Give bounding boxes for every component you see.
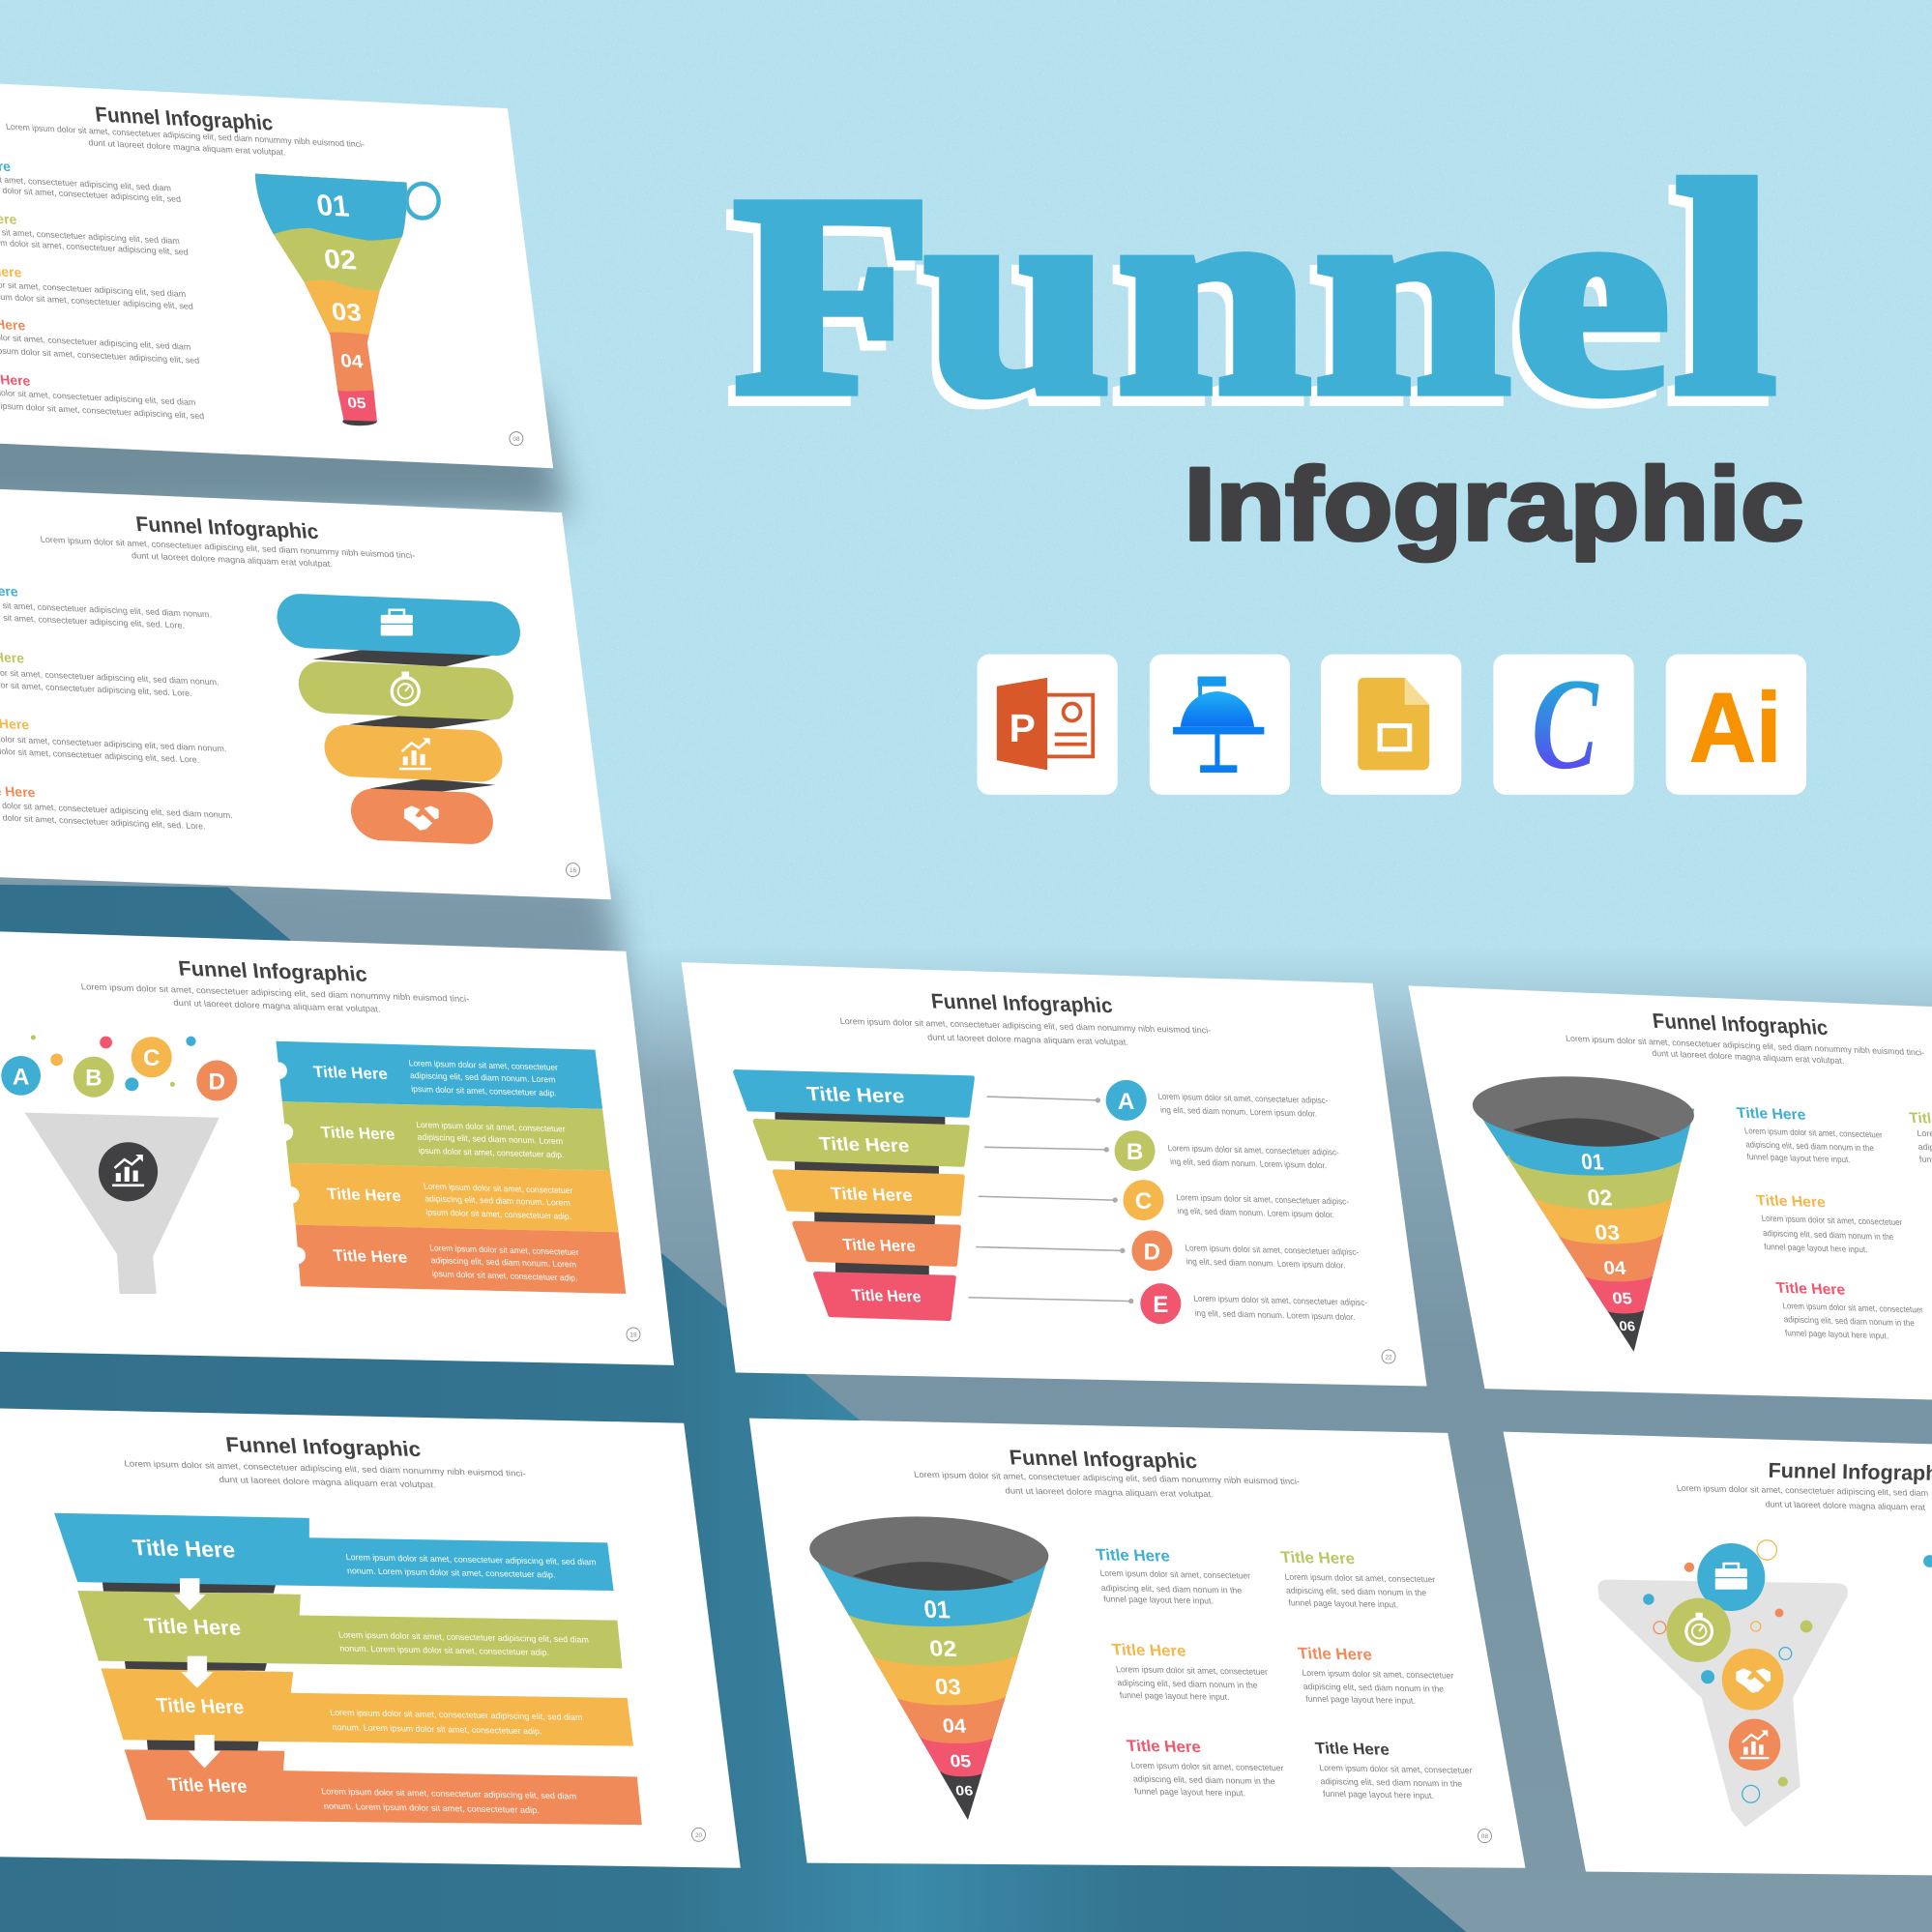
text items: Title Here: [1755, 1192, 1827, 1211]
text items: Lorem ipsum dolor sit amet, consectetuer: [1115, 1664, 1268, 1677]
intro text: Lorem ipsum dolor sit amet, consectetuer adipiscing elit, sed diam nonummy nibh euismod tinci-: [80, 981, 470, 1004]
icon: Illustrator: [1666, 655, 1806, 795]
page number: [567, 864, 580, 877]
stepped funnel: Lorem ipsum dolor sit amet, consectetuer adipiscing elit, sed diam: [321, 1786, 577, 1801]
descriptions: ing elit, sed diam nonum. Lorem ipsum dolor.: [1177, 1206, 1334, 1219]
intro text: Lorem ipsum dolor sit amet, consectetuer adipiscing elit, sed diam nonummy nibh euismod tinci-: [40, 535, 416, 560]
stacked bands: ipsum dolor sit amet, consectetuer adip.: [418, 1146, 565, 1159]
intro text: dunt ut laoreet dolore magna aliquam erat volutpat.: [88, 137, 286, 158]
icon: Illustrator: Ai: [1689, 672, 1782, 782]
letter badges: B: [1127, 1139, 1143, 1165]
intro text: Lorem ipsum dolor sit amet, consectetuer adipiscing elit, sed diam nonummy nibh euismod tinci-: [839, 1016, 1212, 1035]
title: Funnel Infographic: [929, 989, 1114, 1017]
page number: [510, 432, 523, 446]
text items: [1736, 1105, 1932, 1340]
intro text: dunt ut laoreet dolore magna aliquam erat: [1765, 1499, 1926, 1512]
text items: funnel page layout here input.: [1322, 1789, 1434, 1800]
page number: 19: [629, 1332, 637, 1339]
page number: [1382, 1350, 1395, 1363]
stacked bands: ipsum dolor sit amet, consectetuer adip.: [425, 1207, 572, 1221]
text items: funnel page layout here input.: [1134, 1786, 1246, 1798]
chart: wavy funnel: 05: [346, 395, 367, 412]
text items: Title Here: [1111, 1640, 1187, 1660]
intro text: dunt ut laoreet dolore magna aliquam erat volutpat.: [926, 1032, 1128, 1047]
page number: [627, 1328, 640, 1341]
descriptions: ing elit, sed diam nonum. Lorem ipsum dolor.: [1169, 1156, 1328, 1170]
chart: wavy funnel: 03: [330, 299, 363, 327]
chart: wavy funnel: [247, 166, 439, 431]
title: Funnel Infographic: [1008, 1445, 1198, 1473]
heading: Funnel: F: [734, 139, 931, 453]
panel: slide 19 grey funnel: [0, 931, 674, 1365]
text items: [1095, 1545, 1473, 1800]
grey funnel with icon circles: [1598, 1540, 1932, 1827]
heading: Funnel: n: [1118, 139, 1310, 453]
page number: [1478, 1830, 1491, 1843]
tiered funnel: Title Here: [830, 1184, 914, 1205]
stacked bands: Lorem ipsum dolor sit amet, consectetuer: [429, 1243, 579, 1257]
text items: funnel page layout here input.: [1784, 1328, 1889, 1340]
stacked bands: adipiscing elit, sed diam nonum. Lorem: [424, 1193, 571, 1208]
stacked bands: Lorem ipsum dolor sit amet, consectetuer: [416, 1120, 566, 1134]
descriptions: Lorem ipsum dolor sit amet, consectetuer adipisc-: [1176, 1192, 1350, 1207]
letter badges: [1106, 1080, 1181, 1324]
cone chart: 01: [922, 1596, 951, 1624]
tiered funnel: Title Here: [851, 1286, 922, 1305]
connector lines: [969, 1097, 1133, 1303]
title: Funnel Infographic: [134, 512, 320, 543]
letter badges: A: [1118, 1089, 1134, 1115]
icon: briefcase: [381, 610, 413, 636]
heading: Funnel: u: [918, 149, 1102, 462]
tiered funnel: Title Here: [805, 1083, 906, 1107]
title: Funnel Infographic: [94, 102, 274, 135]
stacked bands: [270, 1041, 626, 1294]
cone chart: 03: [1594, 1220, 1621, 1244]
heading: Funnel: l: [1667, 131, 1769, 466]
stacked bands: ipsum dolor sit amet, consectetuer adip.: [431, 1269, 578, 1283]
grey funnel with bubbles: D: [209, 1068, 225, 1095]
icon: handshake: [404, 805, 439, 831]
heading: Funnel: F: [727, 149, 924, 462]
stepped funnel: Lorem ipsum dolor sit amet, consectetuer adipiscing elit, sed diam: [345, 1552, 597, 1566]
grey funnel with bubbles: [1, 1035, 237, 1294]
text items: adipiscing elit, sed diam nonum in the: [1783, 1314, 1915, 1328]
intro text: dunt ut laoreet dolore magna aliquam erat volutpat.: [1652, 1048, 1845, 1066]
title: Funnel Infographic: [177, 956, 368, 986]
cone chart: 05: [949, 1751, 972, 1771]
descriptions: Lorem ipsum dolor sit amet, consectetuer adipisc-: [1157, 1092, 1329, 1105]
chart: wavy funnel: 02: [322, 244, 358, 276]
text items: adipiscing elit, sed diam nonum in the: [1132, 1774, 1275, 1786]
stepped funnel: Lorem ipsum dolor sit amet, consectetuer adipiscing elit, sed diam: [329, 1708, 583, 1722]
text items: Title Here: [1736, 1105, 1807, 1124]
text items: Lorem ipsum dolor sit amet, consectetuer: [1099, 1568, 1251, 1581]
icon: Canva: [1493, 653, 1634, 797]
tiered funnel: Title Here: [818, 1134, 911, 1156]
descriptions: ing elit, sed diam nonum. Lorem ipsum dolor.: [1186, 1256, 1346, 1270]
stacked bands: adipiscing elit, sed diam nonum. Lorem: [417, 1132, 564, 1146]
page number: 16: [570, 867, 577, 874]
stacked bands: Title Here: [320, 1123, 396, 1144]
text items: Title Here: [1314, 1739, 1390, 1759]
stacked bands: Lorem ipsum dolor sit amet, consectetuer: [408, 1058, 559, 1072]
intro text: dunt ut laoreet dolore magna aliquam erat volutpat.: [1005, 1485, 1214, 1499]
stepped funnel: [54, 1513, 642, 1825]
text list: [0, 156, 205, 421]
heading: Funnel: [727, 121, 1775, 466]
page number: 08: [512, 436, 520, 443]
stepped funnel: Lorem ipsum dolor sit amet, consectetuer adipiscing elit, sed diam: [337, 1629, 589, 1645]
chart: wavy funnel: 01: [314, 188, 351, 223]
intro text: [80, 981, 470, 1014]
page number: 08: [1481, 1833, 1488, 1840]
intro text: dunt ut laoreet dolore magna aliquam erat volutpat.: [131, 550, 333, 569]
panel: slide 08 cone: [740, 1419, 1526, 1868]
dark teal diagonal background: [0, 885, 1466, 1932]
page number: [691, 1828, 705, 1841]
icon: PowerPoint: P: [1010, 706, 1036, 750]
panel: slide cone six steps right: [1408, 985, 1932, 1400]
panel: slide 22 tiered funnel: [682, 962, 1427, 1387]
cone chart: 01: [1580, 1149, 1605, 1175]
title: Funnel Infographic: [1651, 1009, 1830, 1039]
text items: Lorem ipsum dolor sit amet, consectetuer: [1743, 1126, 1883, 1140]
page number: 22: [1386, 1354, 1392, 1361]
panel: slide icon funnel right: [1504, 1432, 1932, 1875]
stepped funnel: Title Here: [143, 1613, 242, 1640]
text items: funnel page layout here input.: [1288, 1597, 1399, 1609]
tiered funnel: [736, 1072, 972, 1318]
cone chart: 04: [1602, 1258, 1627, 1279]
text items: Lorem ipsum dolor sit amet, consectetuer: [1284, 1572, 1436, 1584]
cone chart: 06: [1619, 1318, 1636, 1333]
letter badges: C: [1135, 1188, 1152, 1215]
intro text: Lorem ipsum dolor sit amet, consectetuer adipiscing elit, sed diam nonummy nibh euismod tinci-: [5, 122, 365, 149]
panel: slide 16 pill funnel: [0, 489, 611, 899]
panel: slide 20 arrow funnel: [0, 1408, 741, 1868]
intro text: Lorem ipsum dolor sit amet, consectetuer adipiscing elit, sed diam nonummy nibh euismod tinci-: [1566, 1034, 1925, 1058]
heading: Funnel: n: [1315, 139, 1509, 453]
cone chart: 05: [1611, 1289, 1633, 1307]
text items: Lorem ipsum dolor sit amet, consectetuer: [1302, 1668, 1454, 1681]
descriptions: ing elit, sed diam nonum. Lorem ipsum dolor.: [1159, 1105, 1317, 1119]
heading: Funnel: n: [1307, 149, 1502, 462]
icon: Keynote: [1150, 655, 1290, 795]
intro text: Lorem ipsum dolor sit amet, consectetuer adipiscing elit, sed diam nonummy nibh euismod tinci-: [913, 1470, 1301, 1486]
text items: funnel page layout here input.: [1103, 1595, 1214, 1606]
intro text: dunt ut laoreet dolore magna aliquam erat volutpat.: [173, 998, 381, 1014]
letter badges: D: [1144, 1239, 1160, 1265]
text items: adipiscing elit, sed diam nonum in the: [1117, 1678, 1258, 1690]
descriptions: Lorem ipsum dolor sit amet, consectetuer adipisc-: [1185, 1243, 1360, 1257]
text items: Title Here: [1775, 1280, 1847, 1299]
text items: funnel page layout here input.: [1305, 1694, 1416, 1706]
panel: slide 08 wavy funnel: [0, 84, 553, 468]
descriptions: Lorem ipsum dolor sit amet, consectetuer adipisc-: [1193, 1294, 1368, 1307]
cone chart: 04: [942, 1714, 968, 1738]
text items: Title Here: [1297, 1644, 1373, 1664]
stepped funnel: Title Here: [155, 1694, 246, 1718]
stacked bands: Title Here: [326, 1185, 402, 1205]
icon: Google Slides: [1321, 655, 1461, 795]
cone chart: [809, 1516, 1048, 1820]
text items: Lorem ipsum dolor sit amet, consectetuer: [1130, 1761, 1284, 1772]
intro text: [913, 1470, 1301, 1499]
icon: stopwatch: [392, 671, 419, 705]
text items: Title Here: [1279, 1548, 1356, 1567]
stacked bands: Title Here: [312, 1063, 389, 1083]
text items: funnel page layout here input.: [1746, 1152, 1851, 1164]
cone chart: 06: [955, 1782, 974, 1799]
page number: 20: [695, 1832, 702, 1839]
stepped funnel: nonum. Lorem ipsum dolor sit amet, consectetuer adip.: [346, 1566, 556, 1579]
grey funnel with bubbles: A: [13, 1064, 29, 1090]
text items: Title Here: [1095, 1545, 1171, 1566]
intro text: [839, 1016, 1212, 1047]
stacked bands: ipsum dolor sit amet, consectetuer adip.: [411, 1084, 557, 1098]
text items: adipiscing elit, sed diam nonum in the: [1100, 1583, 1243, 1595]
text list: [0, 581, 233, 832]
grey funnel with bubbles: B: [85, 1066, 102, 1092]
stepped funnel: Title Here: [132, 1535, 237, 1563]
cone chart: 02: [1586, 1185, 1613, 1211]
stepped funnel: Title Here: [166, 1775, 249, 1798]
text items: adipiscing elit, sed diam nonum in the: [1320, 1776, 1463, 1789]
chart: pill funnel: [274, 593, 523, 845]
tiered funnel: Title Here: [841, 1235, 917, 1255]
descriptions: Lorem ipsum dolor sit amet, consectetuer adipisc-: [1167, 1143, 1339, 1157]
heading: Funnel: l: [1675, 121, 1775, 456]
intro text: dunt ut laoreet dolore magna aliquam erat volutpat.: [219, 1475, 436, 1490]
stepped funnel: nonum. Lorem ipsum dolor sit amet, consectetuer adip.: [332, 1722, 542, 1736]
stacked bands: adipiscing elit, sed diam nonum. Lorem: [430, 1255, 577, 1270]
stacked bands: adipiscing elit, sed diam nonum. Lorem: [409, 1070, 556, 1084]
stepped funnel: nonum. Lorem ipsum dolor sit amet, consectetuer adip.: [339, 1644, 550, 1657]
subheading: Infographic: Infographic: [1185, 446, 1803, 562]
text items: funnel page layout here input.: [1764, 1242, 1868, 1254]
cone chart: 03: [934, 1674, 962, 1699]
letter badges: E: [1153, 1292, 1168, 1318]
cone chart: [1472, 1076, 1694, 1352]
text items: adipiscing elit, sed diam nonum in the: [1303, 1682, 1445, 1694]
icon: growth chart: [399, 738, 431, 769]
title: Funnel Infographic: [224, 1432, 422, 1461]
intro text: Lorem ipsum dolor sit amet, consectetuer adipiscing elit, sed diam: [1676, 1483, 1929, 1498]
heading: Funnel: n: [1110, 149, 1303, 462]
text items: Lorem ipsum dolor sit amet, consectetuer: [1761, 1214, 1903, 1227]
text items: adipiscing elit, sed diam nonum in the: [1285, 1586, 1427, 1597]
text items: Lorem ipsum dolor sit amet, consectetuer: [1319, 1763, 1473, 1775]
text items: adipiscing elit, sed diam nonum in the: [1762, 1228, 1894, 1242]
stepped funnel: nonum. Lorem ipsum dolor sit amet, consectetuer adip.: [323, 1801, 540, 1815]
text items: adipiscing elit, sed diam nonum in the: [1745, 1139, 1874, 1153]
text items: funnel page layout here input.: [1119, 1690, 1230, 1702]
cone chart: 02: [928, 1635, 958, 1661]
chart: wavy funnel: 04: [339, 351, 365, 372]
icon: PowerPoint: [977, 655, 1118, 795]
intro text: Lorem ipsum dolor sit amet, consectetuer adipiscing elit, sed diam nonummy nibh euismod tinci-: [124, 1458, 526, 1478]
text items: Title Here: [1126, 1737, 1202, 1756]
stacked bands: Lorem ipsum dolor sit amet, consectetuer: [423, 1182, 573, 1195]
stacked bands: Title Here: [332, 1246, 408, 1267]
intro text: [124, 1458, 526, 1490]
heading: Funnel: u: [925, 139, 1110, 453]
descriptions: ing elit, sed diam nonum. Lorem ipsum dolor.: [1194, 1308, 1356, 1322]
grey funnel with bubbles: C: [143, 1045, 160, 1071]
heading: Funnel: e: [1507, 149, 1662, 462]
icon: Canva: C: [1532, 653, 1599, 797]
heading: Funnel: e: [1514, 139, 1670, 453]
descriptions: [1157, 1092, 1368, 1322]
intro text: [1676, 1483, 1929, 1512]
